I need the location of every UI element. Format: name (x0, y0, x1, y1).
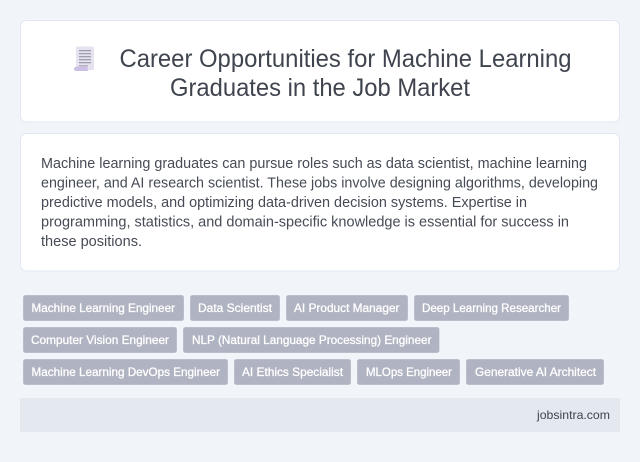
panel: description (20, 134, 620, 271)
tag: AI Ethics Specialist (234, 360, 350, 384)
tag: Generative AI Architect: Generative AI Architect (475, 365, 597, 379)
tag: NLP Engineer (184, 328, 439, 352)
description text (41, 156, 598, 250)
description text: Machine learning graduates can pursue roles such as data scientist, machine learning (41, 156, 587, 172)
icon: paper scroll document (74, 46, 94, 71)
tag: Computer Vision Engineer (24, 328, 176, 352)
tag: Machine Learning DevOps Engineer: Machine Learning DevOps Engineer (32, 365, 220, 379)
tag: Deep Learning Researcher (414, 296, 568, 320)
tag: AI Product Manager (286, 296, 408, 320)
tag: Computer Vision Engineer: Computer Vision Engineer (31, 333, 169, 347)
tag: Deep Learning Researcher: Deep Learning Researcher (422, 301, 561, 315)
tag: NLP Engineer: NLP (Natural Language Processing) Engineer (192, 333, 432, 347)
tag: Data Scientist: Data Scientist (198, 301, 273, 315)
tag: Generative AI Architect (466, 360, 604, 384)
footer bar (20, 398, 620, 432)
footer source text: jobsintra.com (536, 408, 610, 422)
tag: AI Product Manager: AI Product Manager (294, 301, 400, 315)
description text: these positions. (41, 234, 142, 250)
tag: Machine Learning Engineer: Machine Learning Engineer (32, 301, 175, 315)
tag: MLOps Engineer (358, 360, 460, 384)
panel: header (20, 20, 620, 122)
tag: Machine Learning DevOps Engineer (24, 360, 228, 384)
tag: MLOps Engineer: MLOps Engineer (366, 365, 452, 379)
job role tags (24, 296, 604, 384)
tag: AI Ethics Specialist: AI Ethics Specialist (242, 365, 344, 379)
heading (120, 45, 572, 102)
description text: programming, statistics, and domain-specific knowledge is essential for success in (41, 214, 569, 230)
heading: Career Opportunities for Machine Learning (120, 45, 572, 73)
tag: Machine Learning Engineer (24, 296, 184, 320)
tag: Data Scientist (190, 296, 280, 320)
heading: Graduates in the Job Market (170, 74, 470, 102)
description text: predictive models, and optimizing data-driven decision systems. Expertise in (41, 195, 527, 211)
description text: engineer, and AI research scientist. These jobs involve designing algorithms, developing (41, 176, 598, 192)
